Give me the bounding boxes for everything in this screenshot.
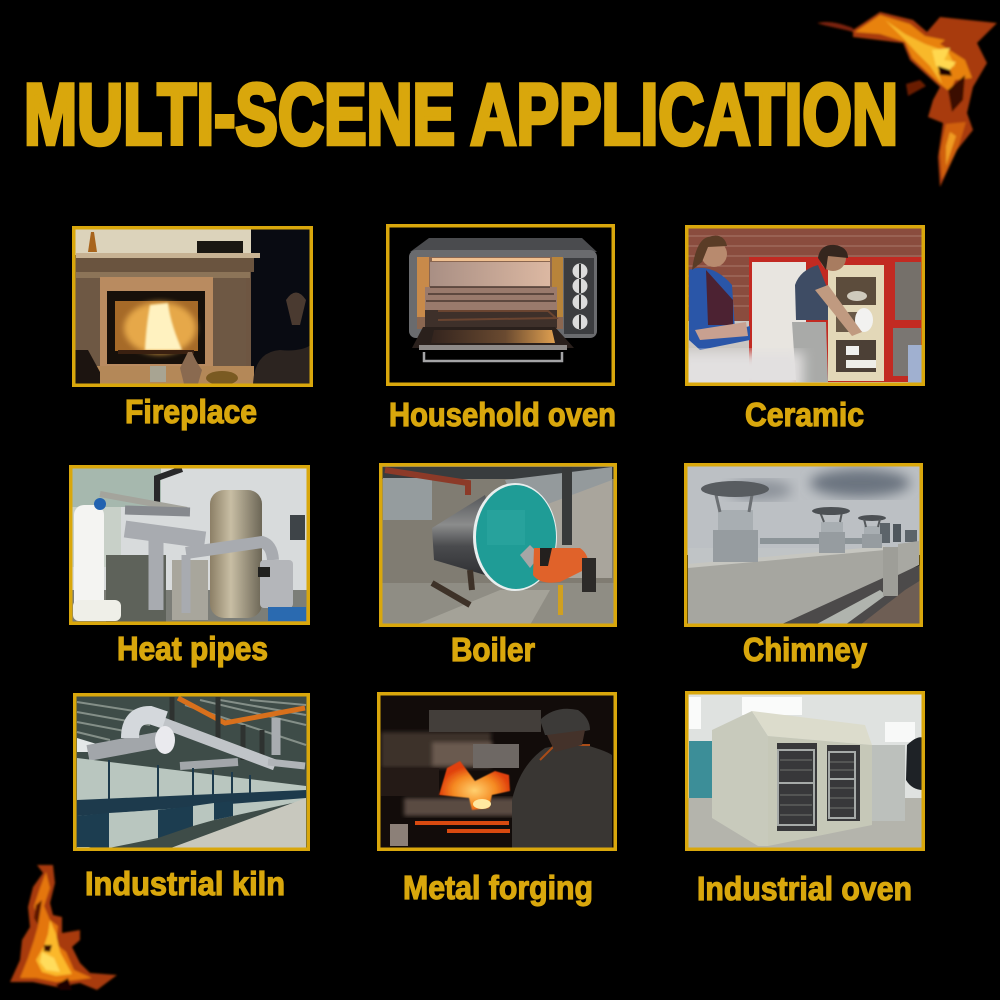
left figure <box>75 350 100 385</box>
floor <box>168 798 306 849</box>
chair <box>253 345 311 385</box>
firebox <box>107 291 205 364</box>
open door <box>872 745 905 821</box>
label: Ceramic: Ceramic <box>745 396 864 433</box>
oven body <box>409 250 597 338</box>
kiln side panels <box>893 262 921 376</box>
floor <box>687 798 923 849</box>
chimney 3 <box>858 515 886 548</box>
icon: flame bottom left <box>10 865 117 990</box>
ceiling stripes <box>77 700 306 745</box>
beam <box>100 494 187 510</box>
lower panels <box>77 801 233 848</box>
oven body <box>712 711 872 846</box>
machinery <box>381 732 491 768</box>
label: Chimney: Chimney <box>743 631 868 668</box>
vase <box>88 232 97 252</box>
white pipe <box>73 505 121 621</box>
door handle <box>424 352 562 361</box>
panel: ceramic <box>678 227 923 392</box>
rack openings <box>777 743 860 831</box>
left light patch <box>77 738 100 752</box>
boiler body <box>432 495 486 575</box>
columns <box>172 697 262 760</box>
parapet wall <box>688 541 921 625</box>
hot strips <box>415 821 509 825</box>
tank <box>210 490 262 618</box>
panel: boiler <box>381 465 615 625</box>
oven top <box>410 238 597 252</box>
blue cover <box>268 607 306 621</box>
mist <box>688 348 810 382</box>
kiln shelves <box>828 265 884 381</box>
potter left <box>689 236 750 350</box>
kiln body <box>77 758 306 850</box>
pipe cluster <box>106 555 166 623</box>
base rails <box>432 570 472 605</box>
label: Metal forging: Metal forging <box>403 869 593 906</box>
dark drum <box>906 737 923 790</box>
anvil <box>404 798 520 816</box>
glowing metal <box>439 761 510 810</box>
icon: flame top right <box>817 12 997 187</box>
panel: industrial oven <box>687 693 923 849</box>
navy band <box>77 790 306 816</box>
panel: industrial kiln <box>75 695 308 850</box>
silver ducts <box>88 715 305 766</box>
table and decanter <box>96 352 254 384</box>
open door <box>412 327 574 350</box>
label: Household oven: Household oven <box>389 396 616 433</box>
teal end <box>473 483 557 591</box>
red pipe <box>385 470 468 495</box>
books <box>197 241 243 253</box>
mantel <box>76 253 260 367</box>
smith <box>512 709 612 849</box>
control panel <box>564 258 594 334</box>
clouds <box>810 469 910 497</box>
wrapped valve <box>260 560 293 608</box>
potter right <box>792 245 862 382</box>
label: Industrial kiln: Industrial kiln <box>85 865 285 902</box>
panel: metal forging <box>379 694 615 849</box>
panel: fireplace <box>74 228 311 385</box>
panel: household oven <box>388 226 613 384</box>
chimney 2 <box>812 507 850 553</box>
insulated pipes <box>125 510 273 613</box>
kiln door <box>752 262 806 380</box>
burner <box>520 545 596 615</box>
dark overhead pipes <box>157 469 182 505</box>
label: Heat pipes: Heat pipes <box>117 630 268 667</box>
brick wall <box>687 227 923 321</box>
window <box>290 515 305 540</box>
teal tank <box>689 741 712 798</box>
label: Boiler: Boiler <box>451 631 535 668</box>
label: Industrial oven: Industrial oven <box>697 870 912 907</box>
panel: heat pipes <box>71 467 308 623</box>
cavity <box>417 257 563 329</box>
orange beam <box>178 698 305 723</box>
label: Fireplace: Fireplace <box>125 393 257 430</box>
far buildings <box>760 523 917 544</box>
wine glass <box>286 292 306 325</box>
chimney 1 <box>701 481 769 562</box>
panel: chimney <box>686 465 921 625</box>
kiln frame <box>749 257 923 382</box>
note <box>390 824 408 846</box>
